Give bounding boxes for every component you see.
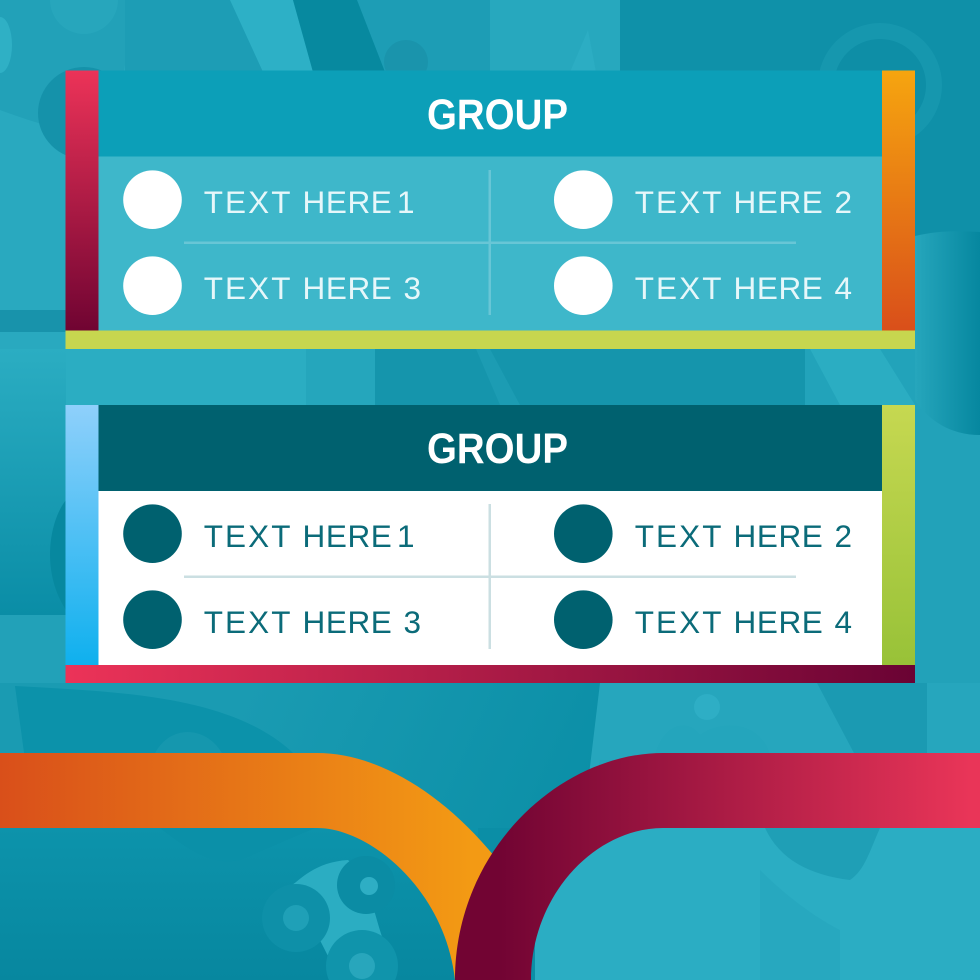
panel one entry 3: HERE [302, 270, 392, 306]
panel two entry 4: TEXT [635, 604, 724, 640]
panel one entry 2: 2 [834, 184, 852, 220]
panel one entry 3: 3 [404, 270, 421, 306]
panel two entry 2: HERE [734, 518, 823, 554]
panel one entry 1: 1 [397, 184, 415, 220]
panel one bottom bar [66, 330, 915, 349]
left ribbon [0, 753, 495, 980]
panel one header band [98, 70, 882, 156]
panel one entry 1: TEXT [204, 184, 293, 220]
panel two entry 3: TEXT [204, 604, 293, 640]
right ribbon [455, 753, 980, 980]
panel one entry 4: 4 [834, 270, 852, 306]
panel two left accent bar [66, 405, 98, 665]
panel: group one [66, 70, 915, 349]
panel two heading: GROUP [427, 425, 568, 473]
panel two body [98, 491, 882, 665]
panel two entry 4: 4 [834, 604, 852, 640]
panel two entry 1: HERE [302, 518, 392, 554]
panel two entry 1: TEXT [204, 518, 293, 554]
panel two entry 1: 1 [397, 518, 415, 554]
panel one entry 4: HERE [734, 270, 823, 306]
panel two bottom bar [66, 665, 915, 683]
panel two entry 4 [554, 590, 852, 649]
panel two entry 4: HERE [734, 604, 823, 640]
panel two entry 3: 3 [404, 604, 421, 640]
panel two entry 3: HERE [302, 604, 392, 640]
panel one right accent bar [882, 70, 915, 330]
panel two entry 2: TEXT [635, 518, 724, 554]
panel one left accent bar [66, 70, 98, 330]
panel two entry 2 [554, 504, 852, 563]
panel: group two [66, 405, 915, 683]
panel two entry 1 [123, 504, 415, 563]
panel two header band [98, 405, 882, 491]
panel one entry 2: TEXT [635, 184, 724, 220]
panel one body [98, 156, 882, 330]
panel one entry 4: TEXT [635, 270, 724, 306]
panel one entry 3: TEXT [204, 270, 293, 306]
background football motif [262, 856, 398, 980]
panel one entry 1 [123, 170, 415, 229]
panel one entry 3 [123, 256, 421, 315]
panel one entry 1: HERE [302, 184, 392, 220]
panel two right accent bar [882, 405, 915, 665]
panel one entry 2: HERE [734, 184, 823, 220]
panel two entry 2: 2 [834, 518, 852, 554]
panel one heading: GROUP [427, 91, 568, 139]
panel one entry 2 [554, 170, 852, 229]
panel one entry 4 [554, 256, 852, 315]
panel two entry 3 [123, 590, 421, 649]
